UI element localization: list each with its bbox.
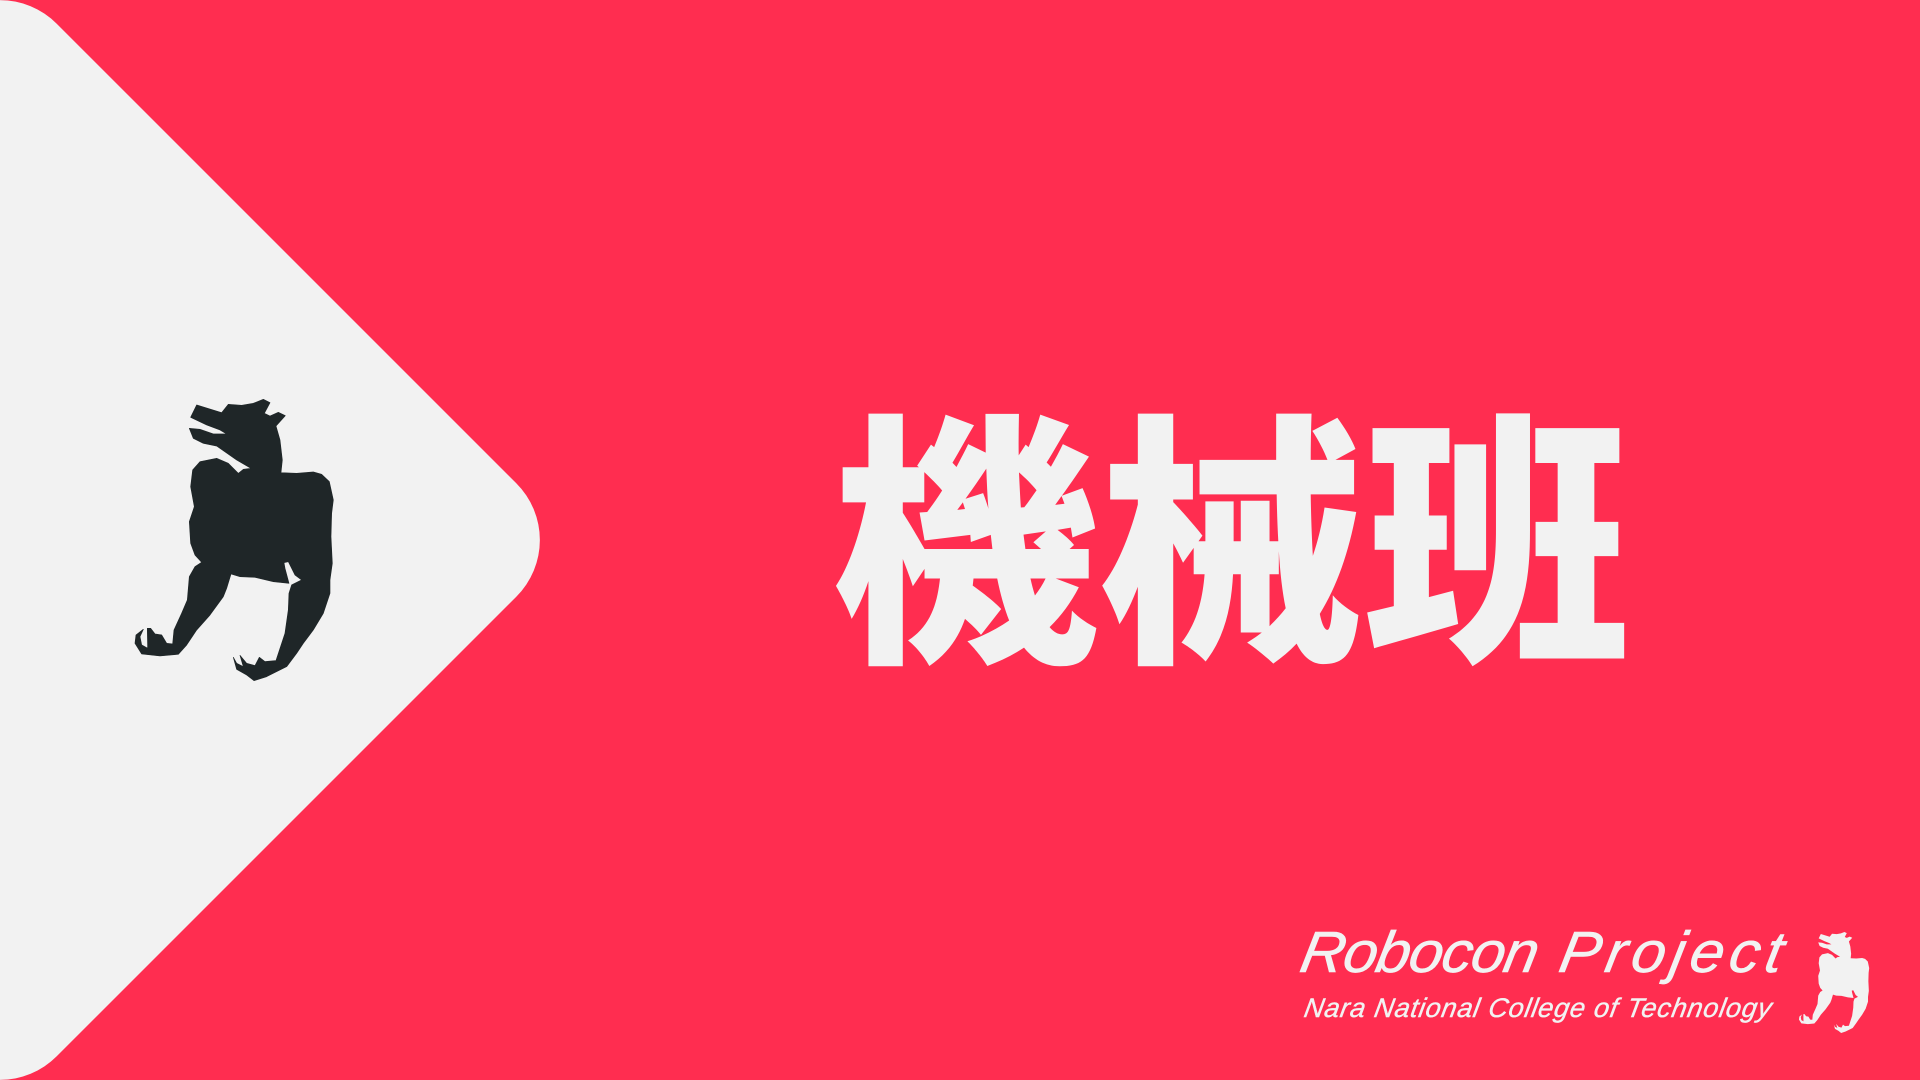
title xyxy=(832,401,1630,698)
footer heading: Robocon Project xyxy=(1296,920,1792,985)
panel: rounded arrow shape xyxy=(0,0,540,1080)
title: 班 xyxy=(1364,401,1630,698)
title: 械 xyxy=(1099,401,1365,698)
footer heading: Robocon Project: Robocon xyxy=(1296,920,1545,985)
icon: small deer silhouette xyxy=(1799,932,1869,1033)
icon: deer silhouette xyxy=(135,399,333,681)
footer heading: Robocon Project: Project xyxy=(1555,920,1792,985)
footer subheading: college name: Nara National College of Technology xyxy=(1302,992,1776,1023)
title: 機 xyxy=(832,401,1098,698)
